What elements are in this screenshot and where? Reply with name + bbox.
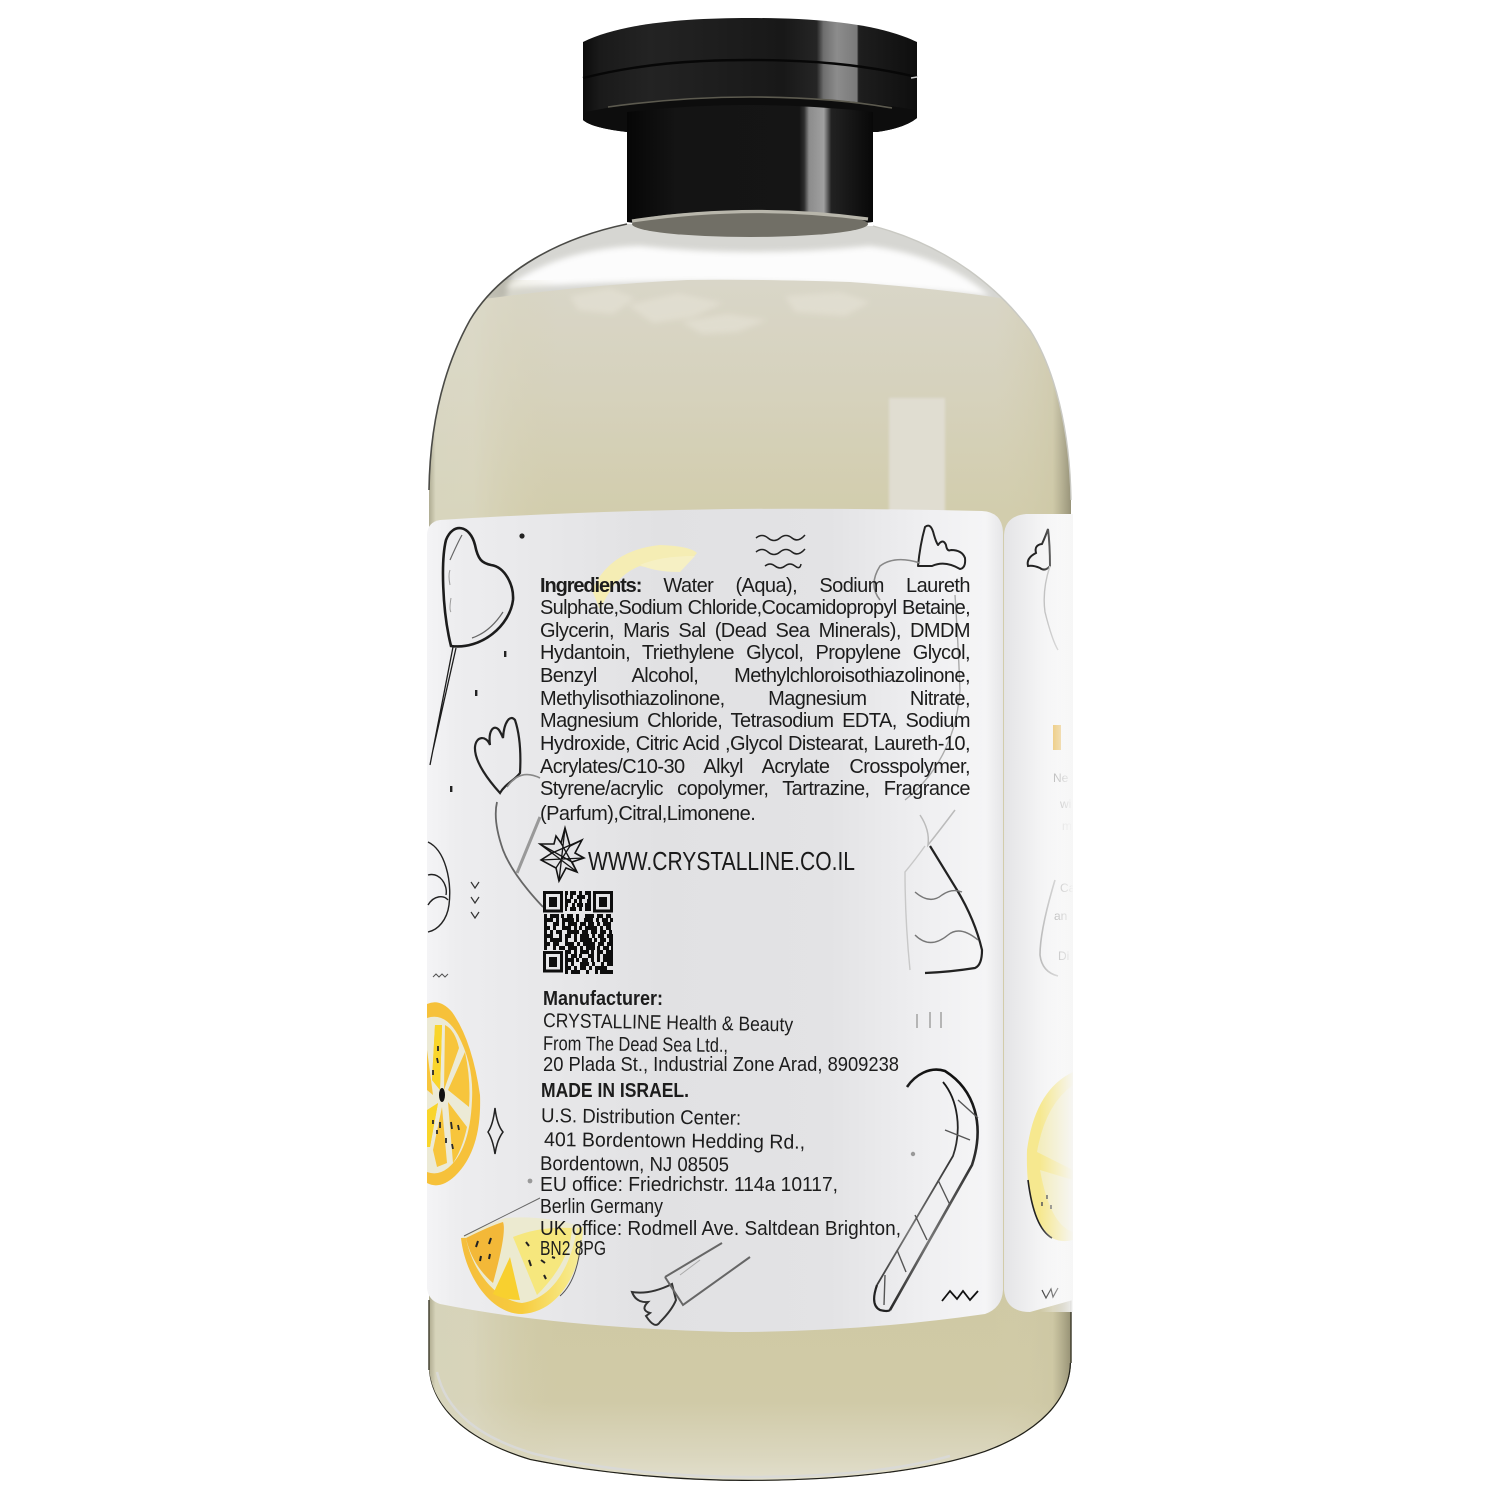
doodle: heart lollipop (430, 528, 513, 765)
ingredients text block: Methylisothiazolinone, Magnesium Nitrate, (540, 688, 970, 710)
front label faded text: m (1062, 819, 1072, 833)
doodle: chevrons (471, 882, 479, 918)
manufacturer block: BN2 8PG (540, 1238, 606, 1260)
doodle: candy on front label (1028, 529, 1058, 976)
ingredients text block: Ingredients: Water (Aqua), Sodium Laureth (540, 575, 970, 597)
logo: crystal star (540, 828, 584, 881)
ingredients text block (540, 575, 970, 825)
doodle: pale lemon (592, 545, 697, 610)
doodle: small grey dots (528, 1152, 915, 1183)
bottle body (420, 224, 1080, 1500)
ingredients text block: Benzyl Alcohol, Methylchloroisothiazolinone, (540, 665, 970, 687)
ingredients text block: Styrene/acrylic copolymer, Tartrazine, Fragrance (540, 778, 970, 800)
manufacturer block: UK office: Rodmell Ave. Saltdean Brighton, (540, 1218, 901, 1240)
doodle: candy left (475, 718, 543, 907)
front label faded text: an (1054, 909, 1067, 923)
doodle: candy bottom (632, 1243, 750, 1325)
front label faded text: 7 (1060, 1196, 1070, 1216)
ingredients text block: Acrylates/C10-30 Alkyl Acrylate Crosspolymer, (540, 756, 970, 778)
ingredients text block: (Parfum),Citral,Limonene. (540, 803, 755, 825)
doodle: candy top right (874, 526, 965, 800)
website url: WWW.CRYSTALLINE.CO.IL (588, 848, 855, 876)
manufacturer block: U.S. Distribution Center: (541, 1105, 741, 1130)
manufacturer block: 401 Bordentown Hedding Rd., (544, 1129, 805, 1154)
qr code (544, 892, 613, 972)
doodle: diamond sparkle (488, 1108, 503, 1154)
black cap (583, 18, 917, 132)
ingredients text block: Glycerin, Maris Sal (Dead Sea Minerals), DMDM (540, 620, 970, 642)
manufacturer block (540, 988, 901, 1260)
ingredients text block: Hydantoin, Triethylene Glycol, Propylene Glycol, (540, 642, 970, 664)
manufacturer block: Manufacturer: (543, 988, 663, 1010)
ingredients text block: Magnesium Chloride, Tetrasodium EDTA, Sodium (540, 710, 970, 732)
ingredients text block: Hydroxide, Citric Acid ,Glycol Distearat, Laureth-10, (540, 733, 970, 755)
doodle: wrapped candy right (905, 810, 982, 973)
doodle: pale lemon on front label (1027, 1072, 1073, 1241)
manufacturer block: 20 Plada St., Industrial Zone Arad, 8909238 (543, 1054, 899, 1076)
manufacturer block: MADE IN ISRAEL. (541, 1080, 689, 1102)
bottle illustration (427, 18, 1073, 1481)
front label faded text (1054, 774, 1072, 960)
doodle: lemon slice left (427, 1002, 480, 1185)
doodle: mint swirl (428, 842, 450, 932)
front label edge (1004, 514, 1076, 1312)
manufacturer block: EU office: Friedrichstr. 114a 10117, (540, 1174, 838, 1196)
doodle: three marks (917, 1012, 941, 1028)
front label faded text: Ne (1053, 771, 1069, 785)
front label faded text: Di (1058, 949, 1069, 963)
manufacturer block: Berlin Germany (540, 1196, 663, 1218)
ingredients text block: Sulphate,Sodium Chloride,Cocamidopropyl Betaine, (540, 597, 970, 619)
manufacturer block: Bordentown, NJ 08505 (540, 1153, 729, 1176)
small zigzag on front label (1042, 1288, 1058, 1298)
manufacturer block: From The Dead Sea Ltd., (543, 1033, 728, 1057)
doodle: wave lines (756, 535, 805, 568)
page: bottle product photo (427, 18, 1073, 1481)
front label faded text: Ca (1060, 881, 1076, 895)
neck collar (627, 105, 873, 237)
doodle: zigzag right (942, 1291, 978, 1301)
doodle: lemon wedge (461, 1198, 583, 1314)
doodle: scattered dots (450, 533, 525, 792)
front label faded text: wi (1059, 797, 1071, 811)
front label heading mark (1053, 725, 1061, 750)
doodle: small zigzag left (433, 974, 448, 977)
manufacturer block: CRYSTALLINE Health & Beauty (543, 1010, 793, 1036)
back label (427, 509, 1003, 1332)
doodle: candy cane (874, 1070, 978, 1311)
